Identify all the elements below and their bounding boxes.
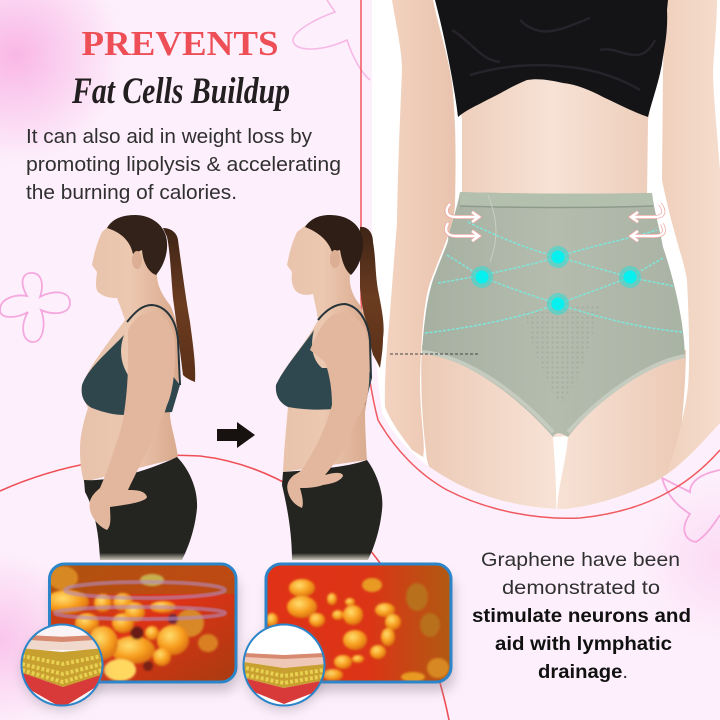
leggings bbox=[282, 460, 382, 560]
body text: weight loss: the burning of calories. bbox=[26, 182, 237, 204]
cyan energy lines bbox=[425, 222, 682, 333]
right arm and hand bbox=[662, 0, 720, 474]
ear bbox=[330, 250, 340, 268]
arrow between figures bbox=[217, 422, 255, 448]
photo panel: shapewear model bbox=[360, 0, 720, 520]
red arc: lower left sweep bbox=[0, 455, 449, 720]
body text: graphene bbox=[472, 549, 691, 683]
decorative flower outline: left bbox=[0, 273, 70, 342]
hair bbox=[107, 215, 167, 275]
hair bbox=[305, 215, 363, 275]
torso bbox=[461, 79, 650, 194]
ponytail bbox=[360, 227, 384, 368]
black lace bra bbox=[435, 0, 668, 117]
sports bra bbox=[276, 330, 372, 410]
arm and hand bbox=[89, 312, 175, 530]
subtitle: Fat Cells Buildup: Fat Cells Buildup bbox=[71, 71, 290, 112]
compression arrows left bbox=[446, 204, 479, 241]
cyan glowing points bbox=[471, 246, 641, 315]
fat cell panel: after bbox=[266, 564, 454, 691]
body text: graphene: aid with lymphatic bbox=[495, 633, 672, 655]
red arc: vertical line and photo frame bbox=[361, 0, 720, 518]
torso and face skin bbox=[276, 222, 371, 472]
body text: graphene: drainage. bbox=[538, 661, 628, 683]
skin layer inset: after bbox=[242, 624, 326, 710]
thighs bbox=[421, 345, 686, 520]
body text: weight loss: promoting lipolysis & accelerating bbox=[26, 154, 341, 176]
bra straps bbox=[318, 304, 371, 378]
body text: graphene: demonstrated to bbox=[502, 577, 660, 599]
ear bbox=[132, 251, 142, 269]
leggings bbox=[84, 457, 197, 560]
after figure bbox=[276, 215, 384, 560]
body text: weight loss bbox=[26, 126, 341, 204]
left arm and hand bbox=[385, 0, 456, 457]
bra straps bbox=[127, 305, 180, 385]
decorative flower outline: top bbox=[293, 0, 370, 80]
torso and face skin bbox=[80, 225, 180, 482]
body text: graphene: stimulate neurons and bbox=[472, 605, 691, 627]
dashed measure line bbox=[390, 354, 478, 355]
sports bra bbox=[82, 335, 180, 415]
skin layer inset: before bbox=[20, 624, 104, 710]
arm and hand bbox=[287, 312, 369, 508]
title: PREVENTS: PREVENTS bbox=[82, 24, 278, 63]
body text: graphene: Graphene have been bbox=[481, 549, 680, 571]
before figure bbox=[80, 215, 197, 560]
body text: weight loss: It can also aid in weight loss by bbox=[26, 126, 312, 148]
high waist briefs bbox=[422, 192, 685, 437]
ponytail bbox=[163, 228, 195, 382]
decorative flower outline: bottom right bbox=[662, 470, 720, 542]
compression arrows right bbox=[631, 204, 664, 241]
fat cell panel: before bbox=[45, 564, 238, 691]
